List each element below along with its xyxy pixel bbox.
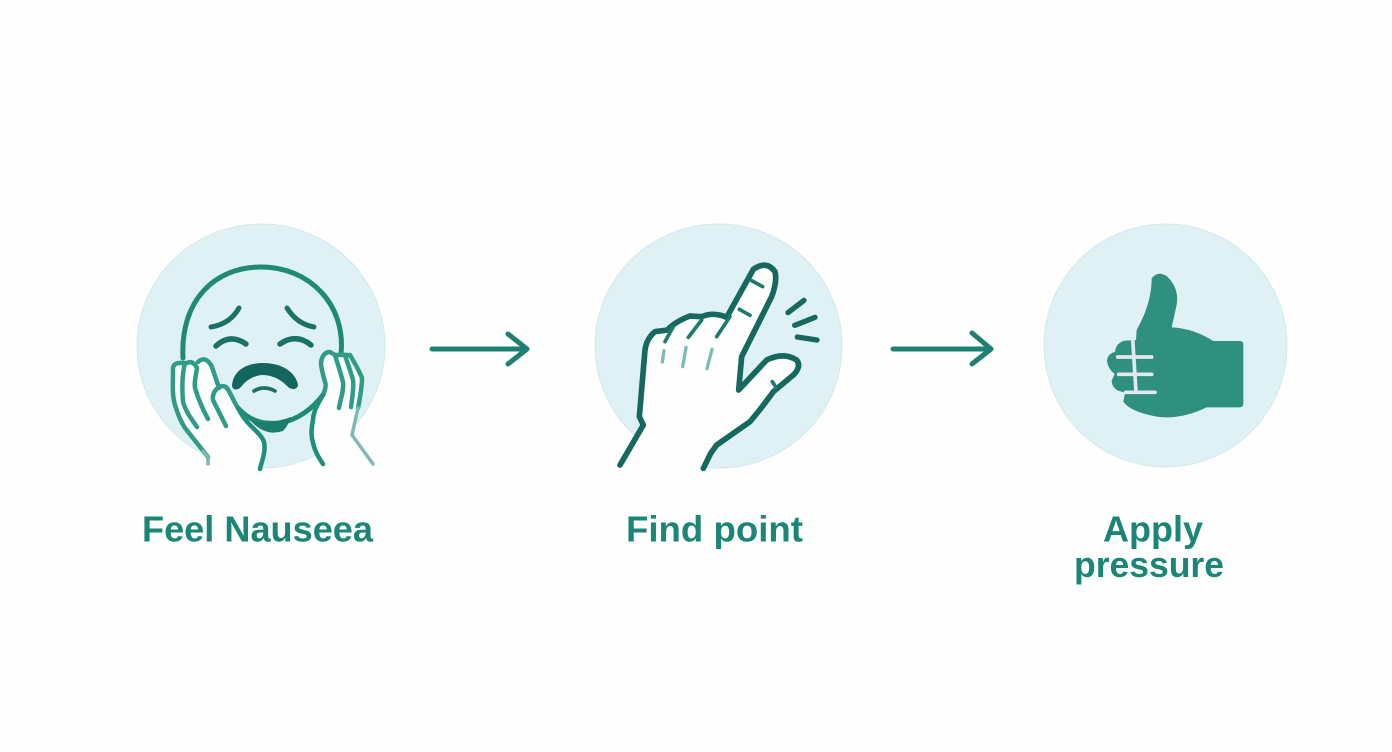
right arm line (312, 395, 323, 464)
icon background circle 2 (595, 224, 842, 468)
lower lip (254, 388, 275, 391)
panel: step 1 feel nausea (137, 224, 385, 550)
panel: step 2 find point (595, 224, 842, 550)
label line: pressure: pressure (1074, 544, 1224, 585)
right wrist fade (352, 408, 373, 464)
left hand outline (173, 359, 238, 457)
label line: Apply: Apply (1103, 508, 1203, 550)
left arm line (238, 408, 265, 469)
icon: pointing hand (620, 265, 817, 468)
finger crease lines (662, 347, 712, 369)
panel: step 3 apply pressure (1044, 224, 1287, 585)
arrow 1 (432, 334, 527, 364)
head outline (183, 267, 341, 358)
left wrist fade (203, 451, 208, 464)
finger separators (1118, 338, 1155, 392)
chin outline (238, 395, 323, 423)
icon background circle 3 (1044, 224, 1287, 467)
frowning mouth (232, 363, 298, 389)
chin shadow (250, 417, 291, 433)
press motion lines (788, 300, 817, 340)
eyebrows (211, 308, 314, 327)
icon: nauseous face with hands (173, 267, 373, 472)
hand stroke (620, 265, 799, 468)
knuckle lines (665, 281, 776, 387)
icon background circle 1 (137, 224, 385, 468)
label: Feel Nauseea: Feel Nauseea (142, 508, 374, 550)
closed eyes (216, 339, 311, 346)
label: Find point: Find point (626, 508, 803, 550)
hand fill (620, 265, 799, 468)
left hand white fill (173, 358, 265, 472)
icon: thumbs up (1107, 274, 1243, 417)
right hand white fill (312, 352, 373, 472)
thumb and hand (1107, 274, 1243, 417)
right hand outline (321, 352, 362, 408)
arrow 2 (893, 333, 991, 364)
label: Apply pressure (1074, 508, 1224, 585)
